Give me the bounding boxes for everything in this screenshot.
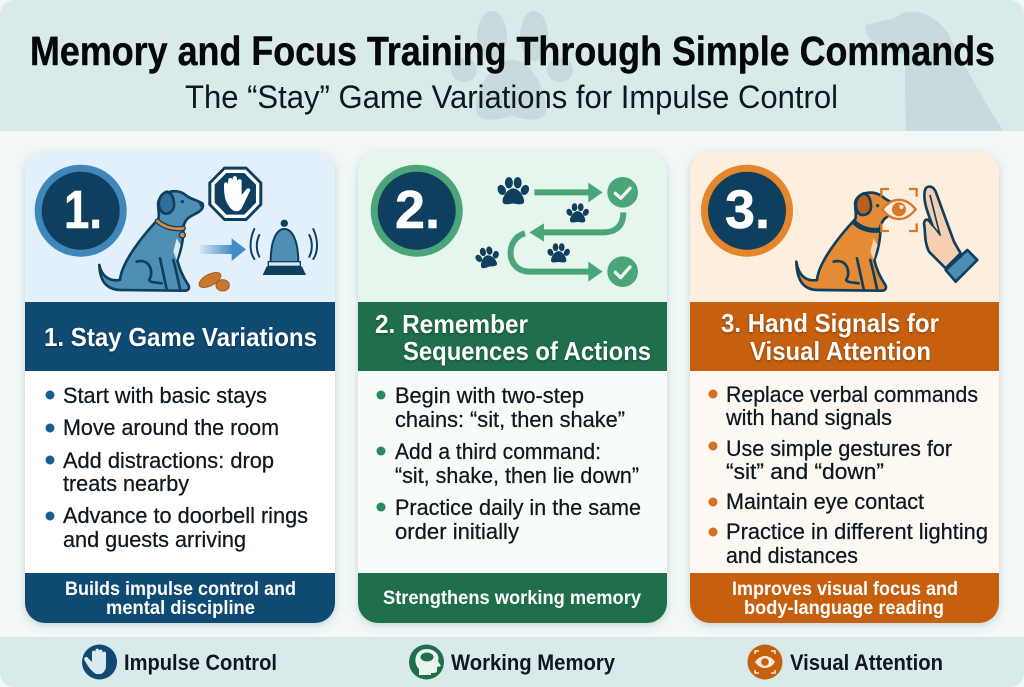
icon: sitting blue dog xyxy=(99,191,204,291)
bullet list 2: “sit, shake, then lie down” xyxy=(395,463,639,488)
footer band 3: Improves visual focus and xyxy=(732,578,958,600)
bullet list 3: and distances xyxy=(726,543,858,568)
image area 3 xyxy=(690,152,999,302)
number badge 2 xyxy=(374,168,459,253)
heading band 2: 2. Remember xyxy=(375,309,528,339)
subtitle: The “Stay” Game Variations for Impulse Control xyxy=(185,79,838,115)
legend bar xyxy=(0,637,1024,687)
bullet list 2 xyxy=(376,383,641,544)
panel: remember sequences xyxy=(358,152,667,623)
legend: working memory: Working Memory xyxy=(451,650,616,675)
number badge 3: 3. xyxy=(725,180,770,240)
heading band 3: 3. Hand Signals for xyxy=(721,308,939,338)
bullet list 3: Practice in different lighting xyxy=(726,519,988,544)
footer band 1 xyxy=(25,573,335,623)
icon: stop hand sign xyxy=(208,167,262,221)
icon: alarm bell xyxy=(251,220,317,275)
bullet list 1: Start with basic stays xyxy=(63,383,267,408)
bullet list 1: and guests arriving xyxy=(63,527,246,552)
footer band 2 xyxy=(358,573,667,623)
bullet list 3: with hand signals xyxy=(725,405,892,430)
number badge 2: 2. xyxy=(395,180,440,240)
footer band 3: body-language reading xyxy=(744,597,944,619)
legend: impulse control: Impulse Control xyxy=(124,650,277,675)
heading band 1: 1. Stay Game Variations xyxy=(44,322,317,352)
heading band 3: Visual Attention xyxy=(750,336,931,366)
bullet list 1: Move around the room xyxy=(63,415,279,440)
icon: sequence arrows and checks xyxy=(473,177,638,287)
bullet list 3: Replace verbal commands xyxy=(726,382,978,407)
footer band 1: mental discipline xyxy=(106,597,255,619)
footer band 2: Strengthens working memory xyxy=(383,587,641,609)
bullet list 3: “sit” and “down” xyxy=(726,459,884,484)
legend: visual attention: Visual Attention xyxy=(790,650,943,675)
bullet list 1: treats nearby xyxy=(63,471,189,496)
panel: stay game variations xyxy=(25,152,335,623)
heading band 1 xyxy=(25,302,335,371)
icon: raised hand xyxy=(924,187,977,282)
bullet list 3 xyxy=(708,382,988,568)
header banner xyxy=(0,0,1024,131)
heading band 2 xyxy=(358,302,667,371)
bullet list 2: Practice daily in the same xyxy=(395,495,641,520)
legend: working memory xyxy=(409,644,616,680)
watermark: paw xyxy=(451,11,573,120)
bullet list 1 xyxy=(46,383,308,552)
bullet list 1: Advance to doorbell rings xyxy=(63,503,308,528)
bullet list 3: Use simple gestures for xyxy=(726,436,952,461)
image area 1 xyxy=(25,152,335,302)
footer band 3 xyxy=(690,573,999,623)
footer band 1: Builds impulse control and xyxy=(65,578,296,600)
bullet list 2: Add a third command: xyxy=(395,439,601,464)
arrow xyxy=(200,238,246,261)
legend: impulse control xyxy=(82,644,277,680)
panel: hand signals xyxy=(690,152,999,623)
number badge 1 xyxy=(38,168,123,253)
heading band 3 xyxy=(690,302,999,371)
image area 2 xyxy=(358,152,667,302)
number badge 1: 1. xyxy=(64,180,102,240)
watermark: dog silhouette xyxy=(866,12,1003,131)
number badge 3 xyxy=(704,168,790,253)
bullet list 2: Begin with two-step xyxy=(395,383,584,408)
bullet list 2: chains: “sit, then shake” xyxy=(395,407,625,432)
bullet list 2: order initially xyxy=(395,519,519,544)
icon: sitting orange dog xyxy=(796,193,900,291)
bullet list 3: Maintain eye contact xyxy=(726,489,924,514)
legend: visual attention xyxy=(748,644,943,680)
icon: dog treats xyxy=(197,269,229,291)
bullet list 1: Add distractions: drop xyxy=(63,448,274,473)
icon: eye focus xyxy=(881,189,917,231)
heading band 2: Sequences of Actions xyxy=(403,336,651,366)
